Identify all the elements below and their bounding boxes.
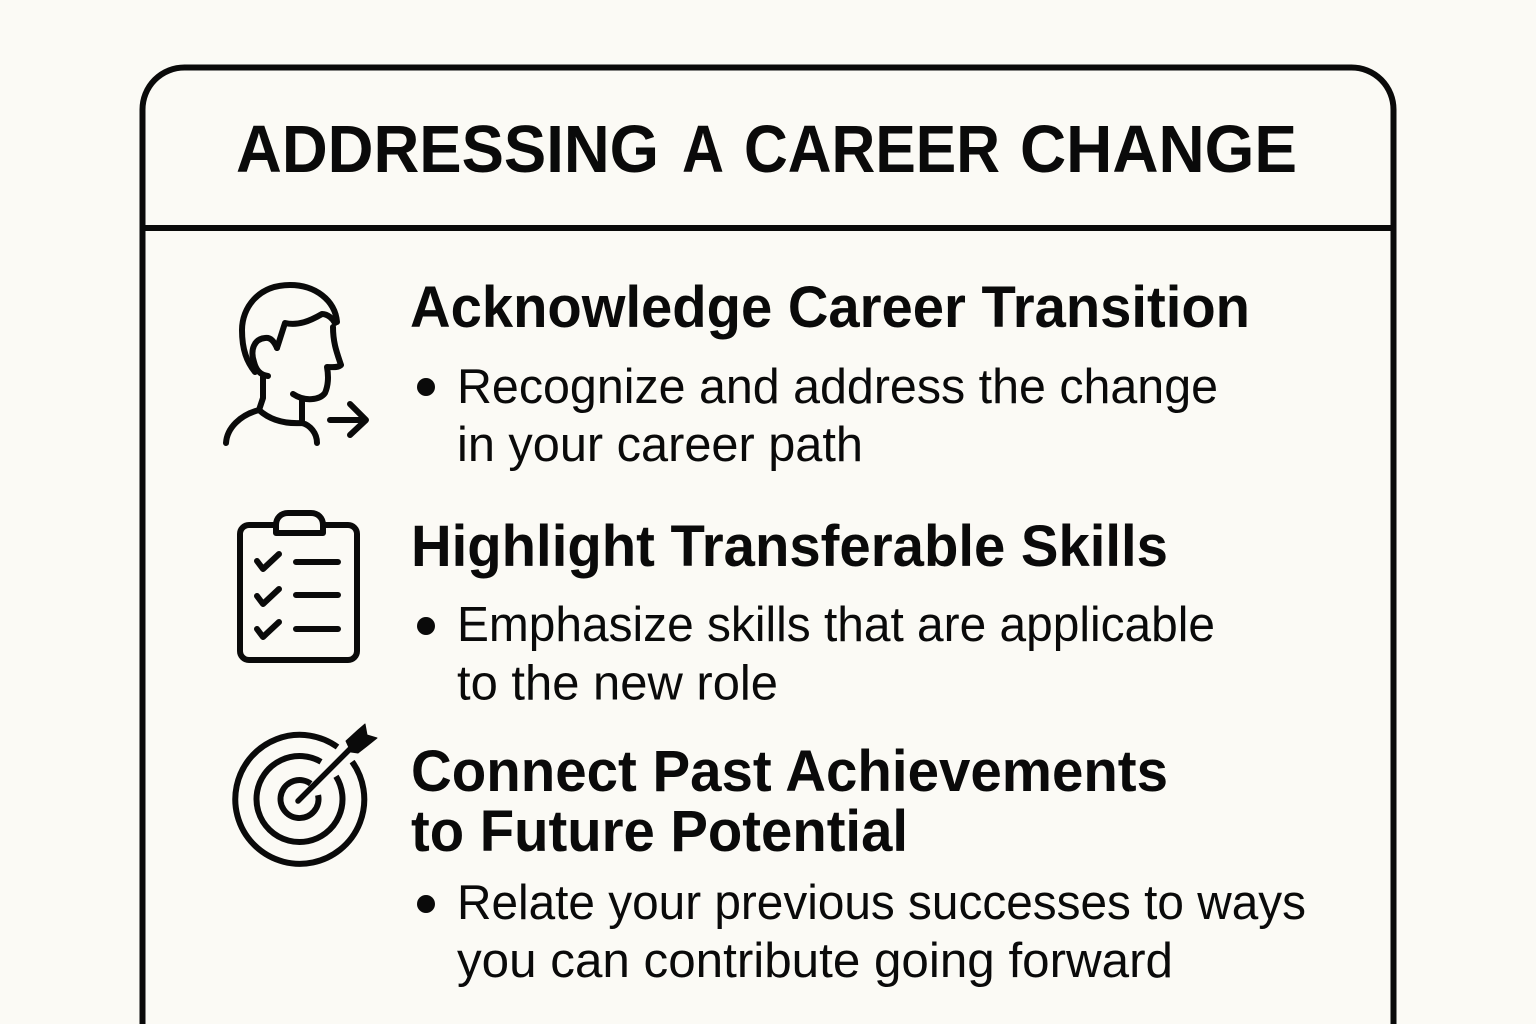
panel: main card bbox=[142, 68, 1394, 1024]
bullet text line 2: you can contribute going forward bbox=[457, 934, 1173, 988]
heading: Acknowledge Career Transition bbox=[410, 275, 1250, 340]
section: highlight transferable skills bbox=[240, 513, 1215, 710]
title: A bbox=[682, 112, 724, 187]
bullet text line 2: in your career path bbox=[457, 418, 863, 472]
title bbox=[236, 112, 1297, 187]
icon: target with arrow bbox=[235, 724, 377, 864]
bullet text line 1: Emphasize skills that are applicable bbox=[457, 598, 1215, 652]
bullet bbox=[417, 378, 435, 396]
bullet text line 2: to the new role bbox=[457, 656, 778, 710]
bullet text line 1: Recognize and address the change bbox=[457, 360, 1218, 414]
icon: clipboard checklist bbox=[240, 513, 357, 660]
heading line 1: Connect Past Achievements bbox=[411, 739, 1168, 804]
title: CHANGE bbox=[1020, 112, 1297, 187]
title: CAREER bbox=[744, 112, 1000, 187]
bullet text line 1: Relate your previous successes to ways bbox=[457, 876, 1306, 930]
bullet bbox=[417, 617, 435, 635]
heading line 2: to Future Potential bbox=[411, 799, 908, 864]
section: connect past achievements bbox=[235, 724, 1306, 988]
section: acknowledge career transition bbox=[226, 275, 1250, 472]
bullet bbox=[417, 895, 435, 913]
icon: person profile with arrow bbox=[226, 285, 366, 443]
heading: Highlight Transferable Skills bbox=[411, 514, 1168, 579]
title: ADDRESSING bbox=[236, 112, 659, 187]
